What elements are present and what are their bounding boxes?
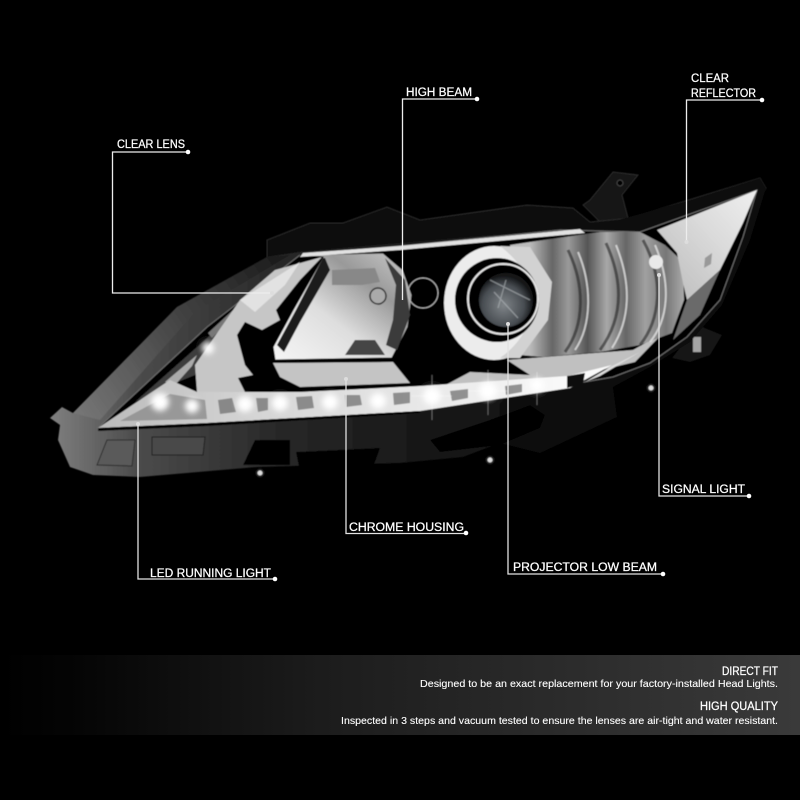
top chrome strip	[300, 229, 585, 257]
feature band	[0, 655, 800, 735]
striped lens shoulder	[135, 312, 240, 402]
mounting bolts	[256, 470, 264, 476]
feature: direct fit: Designed to be an exact replacement for your factory-installed Head Lights.	[420, 678, 778, 690]
feature: high quality: HIGH QUALITY	[700, 701, 778, 713]
callout: clear lens	[112, 139, 274, 295]
callout: clear reflector	[684, 73, 764, 244]
strip sparkle shadows	[218, 384, 522, 414]
callout: projector low beam: PROJECTOR LOW BEAM	[513, 562, 657, 574]
lower housing details	[97, 440, 135, 466]
callout: high beam: HIGH BEAM	[406, 87, 472, 99]
top rear frame	[267, 178, 766, 262]
callout: projector low beam	[506, 322, 665, 576]
upper trim band	[73, 255, 290, 420]
LED flares	[412, 370, 537, 420]
small reflector ring	[408, 278, 438, 308]
projector glass lens	[468, 264, 538, 334]
callout: high beam	[402, 87, 479, 300]
lower housing chrome sweep	[440, 333, 663, 388]
clear reflector signal panel	[657, 190, 757, 300]
outer housing	[50, 178, 766, 477]
headlight product photo	[50, 172, 766, 477]
left clear lens chrome sweep	[195, 257, 322, 392]
lower edge shadow	[98, 411, 420, 431]
high beam chrome bowl	[273, 253, 412, 360]
lower chrome reflector	[273, 362, 410, 387]
feature: direct fit: DIRECT FIT	[722, 666, 778, 678]
mounting tab	[583, 172, 638, 222]
feature: high quality: Inspected in 3 steps and vacuum tested to ensure the lenses are air-tight and water resistant.	[341, 715, 778, 727]
right side bracket	[672, 326, 722, 362]
reflector slot	[152, 437, 205, 455]
callout: clear reflector: CLEAR	[691, 73, 729, 85]
callout: signal light	[657, 273, 751, 498]
lower signal tint	[673, 270, 720, 340]
lens black interior	[98, 190, 757, 428]
callout: LED running light: LED RUNNING LIGHT	[150, 568, 271, 580]
feature: high quality	[341, 701, 778, 727]
callout: signal light: SIGNAL LIGHT	[662, 484, 745, 496]
callout: clear lens: CLEAR LENS	[117, 139, 185, 151]
LED daytime running strip	[98, 352, 640, 431]
callout: LED running light	[136, 422, 277, 581]
callout: chrome housing: CHROME HOUSING	[349, 522, 464, 534]
LED glows	[151, 342, 544, 413]
callout: chrome housing	[344, 377, 468, 535]
projector ring	[444, 246, 544, 360]
chrome projector shroud	[510, 232, 684, 357]
callout: clear reflector: REFLECTOR	[691, 88, 756, 100]
feature: direct fit	[420, 666, 778, 690]
